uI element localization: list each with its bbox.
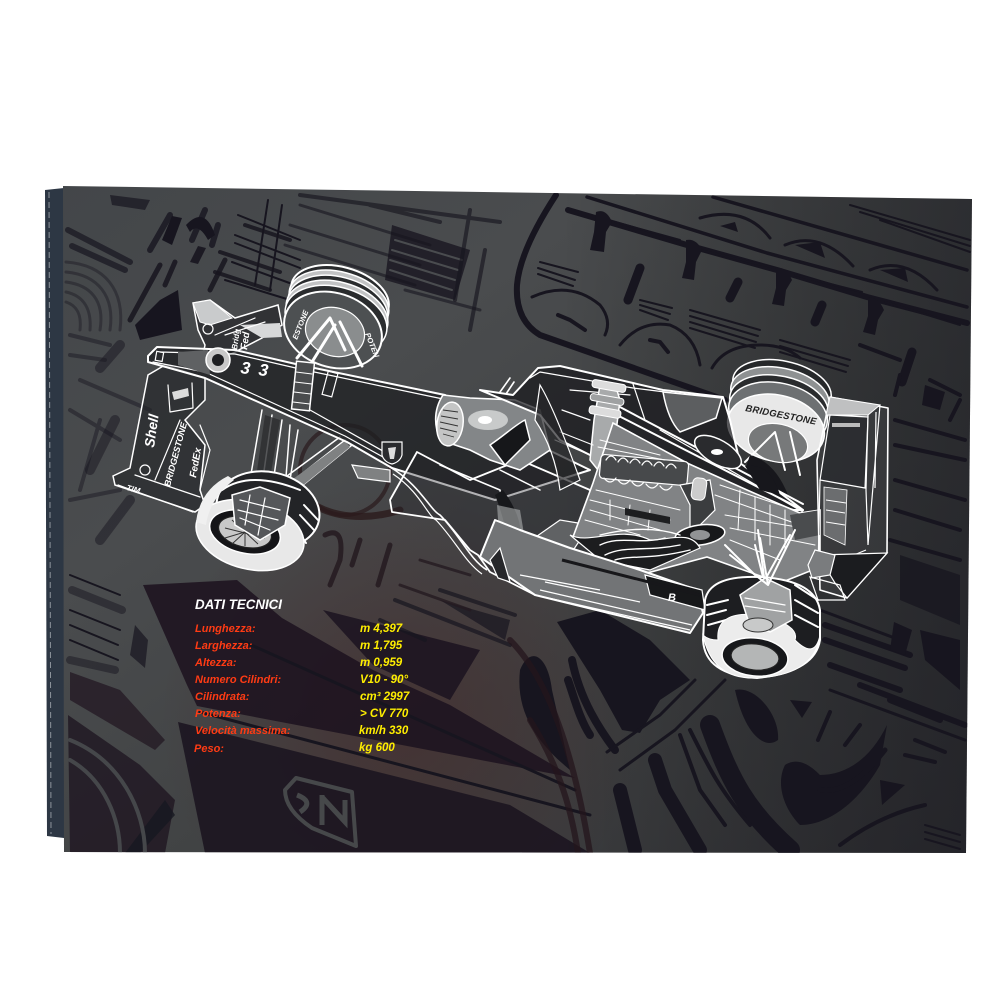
front wing upper section: [193, 300, 282, 370]
pattern: top right engine pistons: [517, 195, 970, 420]
technical data table: [194, 597, 410, 755]
table values: m 0,959: [360, 657, 403, 669]
table values: kg 600: [359, 742, 395, 754]
table labels: [194, 623, 291, 755]
table values: [359, 623, 410, 754]
lower front wing with sponsors: [113, 365, 210, 512]
pattern: lower centre flowing shapes: [519, 610, 960, 850]
rear top tyre: [721, 351, 837, 498]
monocoque nose: 3: [257, 360, 270, 380]
table values: m 1,795: [360, 640, 403, 652]
table values: cm³ 2997: [360, 691, 410, 703]
front wing upper section: Bridg: [230, 328, 242, 350]
lower front wing with sponsors: Shell: [141, 412, 162, 448]
front wing upper section: Fed: [239, 330, 253, 350]
table values: V10 - 90°: [360, 674, 408, 686]
monocoque nose: 3: [239, 358, 252, 378]
sidepod and chassis: [352, 452, 600, 595]
table values: km/h 330: [359, 725, 409, 737]
cover background with engine-drawing pattern: [60, 180, 980, 860]
monocoque nose: [148, 347, 590, 500]
pattern: Bridgestone B logo: [285, 778, 356, 846]
cockpit: [434, 378, 550, 470]
pattern: lower reddish flowing lines: [510, 640, 590, 853]
pattern: centre behind car: [300, 425, 470, 610]
front top tyre: POTEN: [363, 331, 381, 359]
rear top tyre: BRIDGESTONE: [744, 403, 818, 428]
Ferrari badge: [382, 442, 402, 464]
table labels: Peso:: [194, 743, 224, 755]
table labels: Larghezza:: [195, 640, 253, 652]
pattern: top left mechanical shapes: [66, 195, 500, 540]
table labels: Cilindrata:: [195, 691, 250, 703]
front top tyre: ESTONE: [291, 308, 311, 341]
table labels: Velocità massima:: [195, 725, 291, 737]
book spine: [45, 188, 64, 838]
rear bottom tyre: [703, 530, 820, 679]
pattern: lower left dark panels: [68, 575, 590, 853]
table heading: DATI TECNICI: [195, 597, 282, 612]
table labels: Potenza:: [195, 708, 241, 720]
table labels: Altezza:: [194, 657, 237, 669]
lower front wing with sponsors: BRIDGESTONE: [162, 420, 189, 488]
engine cover: [480, 366, 803, 512]
lower front wing with sponsors: TIM: [125, 483, 141, 496]
rear floor and diffuser: [480, 520, 705, 633]
lower front wing with sponsors: FedEx: [188, 447, 204, 479]
table labels: Numero Cilindri:: [195, 674, 282, 686]
pattern: right edge: [820, 420, 965, 740]
rear floor and diffuser: B: [668, 592, 676, 604]
table values: > CV 770: [360, 708, 409, 720]
table labels: Lunghezza:: [195, 623, 256, 635]
front bottom tyre: [188, 462, 327, 581]
table values: m 4,397: [360, 623, 403, 635]
front bottom suspension arms: [250, 410, 352, 502]
illustration: Formula 1 car cutaway: [113, 255, 888, 679]
rear wing: [808, 397, 888, 600]
V10 engine and gearbox: [570, 423, 820, 585]
front top tyre: [274, 255, 396, 381]
